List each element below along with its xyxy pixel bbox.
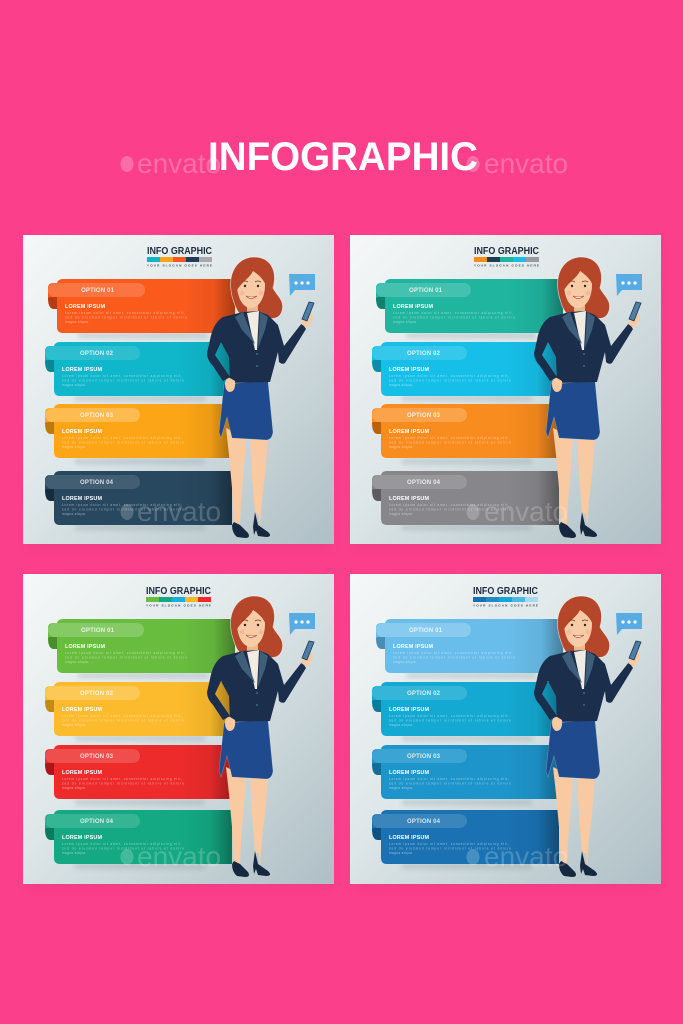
option 02: OPTION 02 (80, 351, 114, 357)
option 04: Lorem ipsum dolor sit amet, consectetur adipiscing elit, (389, 503, 509, 507)
icon: speech bubble (289, 613, 315, 635)
watermark: envato (137, 496, 221, 527)
option 01: sed do eiusmod tempor incididunt ut labore et dolore (393, 316, 515, 320)
icon: speech bubble (289, 274, 315, 296)
option 04: sed do eiusmod tempor incididunt ut labore et dolore (389, 508, 511, 512)
option 03: magna aliqua. (62, 445, 86, 449)
heading (146, 586, 211, 608)
option 01 (48, 279, 235, 338)
option 01 (48, 619, 235, 678)
option 02: OPTION 02 (80, 691, 114, 697)
businesswoman figure (534, 257, 641, 538)
option 04: magna aliqua. (389, 512, 413, 516)
option 01: LOREM IPSUM (65, 644, 106, 650)
heading: YOUR SLOGAN GOES HERE (473, 604, 538, 608)
option 02 (372, 342, 559, 401)
option 03: OPTION 03 (80, 754, 114, 760)
option 03: sed do eiusmod tempor incididunt ut labore et dolore (62, 782, 184, 786)
option 02: sed do eiusmod tempor incididunt ut labore et dolore (62, 378, 184, 382)
option 02: LOREM IPSUM (62, 707, 102, 713)
title: INFOGRAPHIC (208, 135, 478, 179)
icon: speech bubble (616, 274, 642, 296)
option 02 (45, 682, 232, 741)
option 02: magna aliqua. (389, 723, 413, 727)
panel: top-right (350, 235, 661, 549)
option 04: sed do eiusmod tempor incididunt ut labore et dolore (62, 846, 184, 850)
option 03 (45, 745, 232, 805)
option 04: sed do eiusmod tempor incididunt ut labore et dolore (389, 846, 511, 850)
option 03: LOREM IPSUM (62, 429, 102, 435)
businesswoman figure (207, 596, 314, 877)
option 03: magna aliqua. (389, 445, 413, 449)
option 04: OPTION 04 (407, 819, 441, 825)
option 02: LOREM IPSUM (389, 707, 430, 713)
option 01: Lorem ipsum dolor sit amet, consectetur adipiscing elit, (65, 311, 185, 315)
option 04: OPTION 04 (407, 480, 441, 486)
option 04: Lorem ipsum dolor sit amet, consectetur adipiscing elit, (62, 503, 182, 507)
watermark: envato (484, 841, 568, 872)
option 01: OPTION 01 (81, 628, 115, 634)
option 04 (45, 810, 232, 869)
option 02: magna aliqua. (62, 723, 86, 727)
option 01: sed do eiusmod tempor incididunt ut labore et dolore (393, 656, 515, 660)
watermark right: envato (484, 148, 568, 179)
option 01: OPTION 01 (409, 288, 443, 294)
option 04: LOREM IPSUM (62, 496, 102, 502)
heading: INFO GRAPHIC (473, 586, 538, 597)
panel: bottom-right (350, 574, 661, 888)
watermark left: envato (137, 148, 221, 179)
option 02: magna aliqua. (389, 383, 413, 387)
option 02: OPTION 02 (407, 351, 441, 357)
option 01: Lorem ipsum dolor sit amet, consectetur adipiscing elit, (393, 311, 513, 315)
option 04: OPTION 04 (80, 480, 114, 486)
heading: YOUR SLOGAN GOES HERE (474, 264, 539, 268)
option 01: magna aliqua. (65, 320, 89, 324)
option 03: magna aliqua. (389, 786, 413, 790)
option 04: LOREM IPSUM (389, 496, 430, 502)
option 02 (372, 682, 559, 741)
panel: bottom-left (23, 574, 334, 888)
option 04 (372, 471, 559, 530)
option 01 (376, 279, 563, 338)
option 02: OPTION 02 (407, 691, 441, 697)
option 01: Lorem ipsum dolor sit amet, consectetur adipiscing elit, (65, 651, 185, 655)
option 01: LOREM IPSUM (393, 644, 434, 650)
option 02 (45, 342, 232, 401)
option 01: magna aliqua. (65, 660, 89, 664)
option 03: sed do eiusmod tempor incididunt ut labore et dolore (62, 440, 184, 444)
option 02: Lorem ipsum dolor sit amet, consectetur adipiscing elit, (62, 374, 182, 378)
option 03: Lorem ipsum dolor sit amet, consectetur adipiscing elit, (389, 436, 509, 440)
option 02: sed do eiusmod tempor incididunt ut labore et dolore (62, 718, 184, 722)
option 01: Lorem ipsum dolor sit amet, consectetur adipiscing elit, (393, 651, 513, 655)
option 01: magna aliqua. (393, 320, 417, 324)
option 03: LOREM IPSUM (389, 429, 430, 435)
option 02: sed do eiusmod tempor incididunt ut labore et dolore (389, 718, 511, 722)
panel: top-left (23, 235, 334, 549)
option 04: magna aliqua. (62, 851, 86, 855)
option 01: LOREM IPSUM (393, 304, 434, 310)
option 03: magna aliqua. (62, 786, 86, 790)
watermark: envato (484, 496, 568, 527)
option 04 (45, 471, 232, 530)
option 03 (372, 745, 559, 805)
option 04 (372, 810, 559, 869)
option 01: sed do eiusmod tempor incididunt ut labore et dolore (65, 316, 187, 320)
heading (474, 246, 539, 268)
option 02: LOREM IPSUM (389, 367, 430, 373)
option 01: sed do eiusmod tempor incididunt ut labore et dolore (65, 656, 187, 660)
option 03: Lorem ipsum dolor sit amet, consectetur adipiscing elit, (62, 436, 182, 440)
option 01: OPTION 01 (81, 288, 115, 294)
option 04: Lorem ipsum dolor sit amet, consectetur adipiscing elit, (62, 842, 182, 846)
option 01: OPTION 01 (409, 628, 443, 634)
businesswoman figure (207, 257, 314, 538)
heading (147, 246, 212, 268)
option 03: sed do eiusmod tempor incididunt ut labore et dolore (389, 782, 511, 786)
heading: INFO GRAPHIC (146, 586, 211, 597)
heading (473, 586, 538, 608)
option 01: magna aliqua. (393, 660, 417, 664)
option 02: magna aliqua. (62, 383, 86, 387)
option 03: sed do eiusmod tempor incididunt ut labore et dolore (389, 440, 511, 444)
icon: speech bubble (616, 613, 642, 635)
option 04: LOREM IPSUM (62, 835, 102, 841)
option 04: magna aliqua. (62, 512, 86, 516)
heading: INFO GRAPHIC (474, 246, 539, 257)
option 04: sed do eiusmod tempor incididunt ut labore et dolore (62, 508, 184, 512)
heading: INFO GRAPHIC (147, 246, 212, 257)
option 02: Lorem ipsum dolor sit amet, consectetur adipiscing elit, (389, 714, 509, 718)
option 03 (372, 404, 559, 464)
option 03: Lorem ipsum dolor sit amet, consectetur adipiscing elit, (62, 777, 182, 781)
option 04: magna aliqua. (389, 851, 413, 855)
option 03: LOREM IPSUM (389, 770, 430, 776)
option 04: Lorem ipsum dolor sit amet, consectetur adipiscing elit, (389, 842, 509, 846)
option 04: OPTION 04 (80, 819, 114, 825)
heading: YOUR SLOGAN GOES HERE (146, 604, 211, 608)
option 02: sed do eiusmod tempor incididunt ut labore et dolore (389, 378, 511, 382)
businesswoman figure (534, 596, 641, 877)
option 02: Lorem ipsum dolor sit amet, consectetur adipiscing elit, (389, 374, 509, 378)
option 03: Lorem ipsum dolor sit amet, consectetur adipiscing elit, (389, 777, 509, 781)
option 02: Lorem ipsum dolor sit amet, consectetur adipiscing elit, (62, 714, 182, 718)
option 02: LOREM IPSUM (62, 367, 102, 373)
option 04: LOREM IPSUM (389, 835, 430, 841)
heading: YOUR SLOGAN GOES HERE (147, 264, 212, 268)
option 03: LOREM IPSUM (62, 770, 102, 776)
option 03: OPTION 03 (407, 754, 441, 760)
option 03: OPTION 03 (80, 413, 114, 419)
option 03 (45, 404, 232, 464)
option 03: OPTION 03 (407, 413, 441, 419)
option 01 (376, 619, 563, 678)
option 01: LOREM IPSUM (65, 304, 106, 310)
watermark: envato (137, 841, 221, 872)
